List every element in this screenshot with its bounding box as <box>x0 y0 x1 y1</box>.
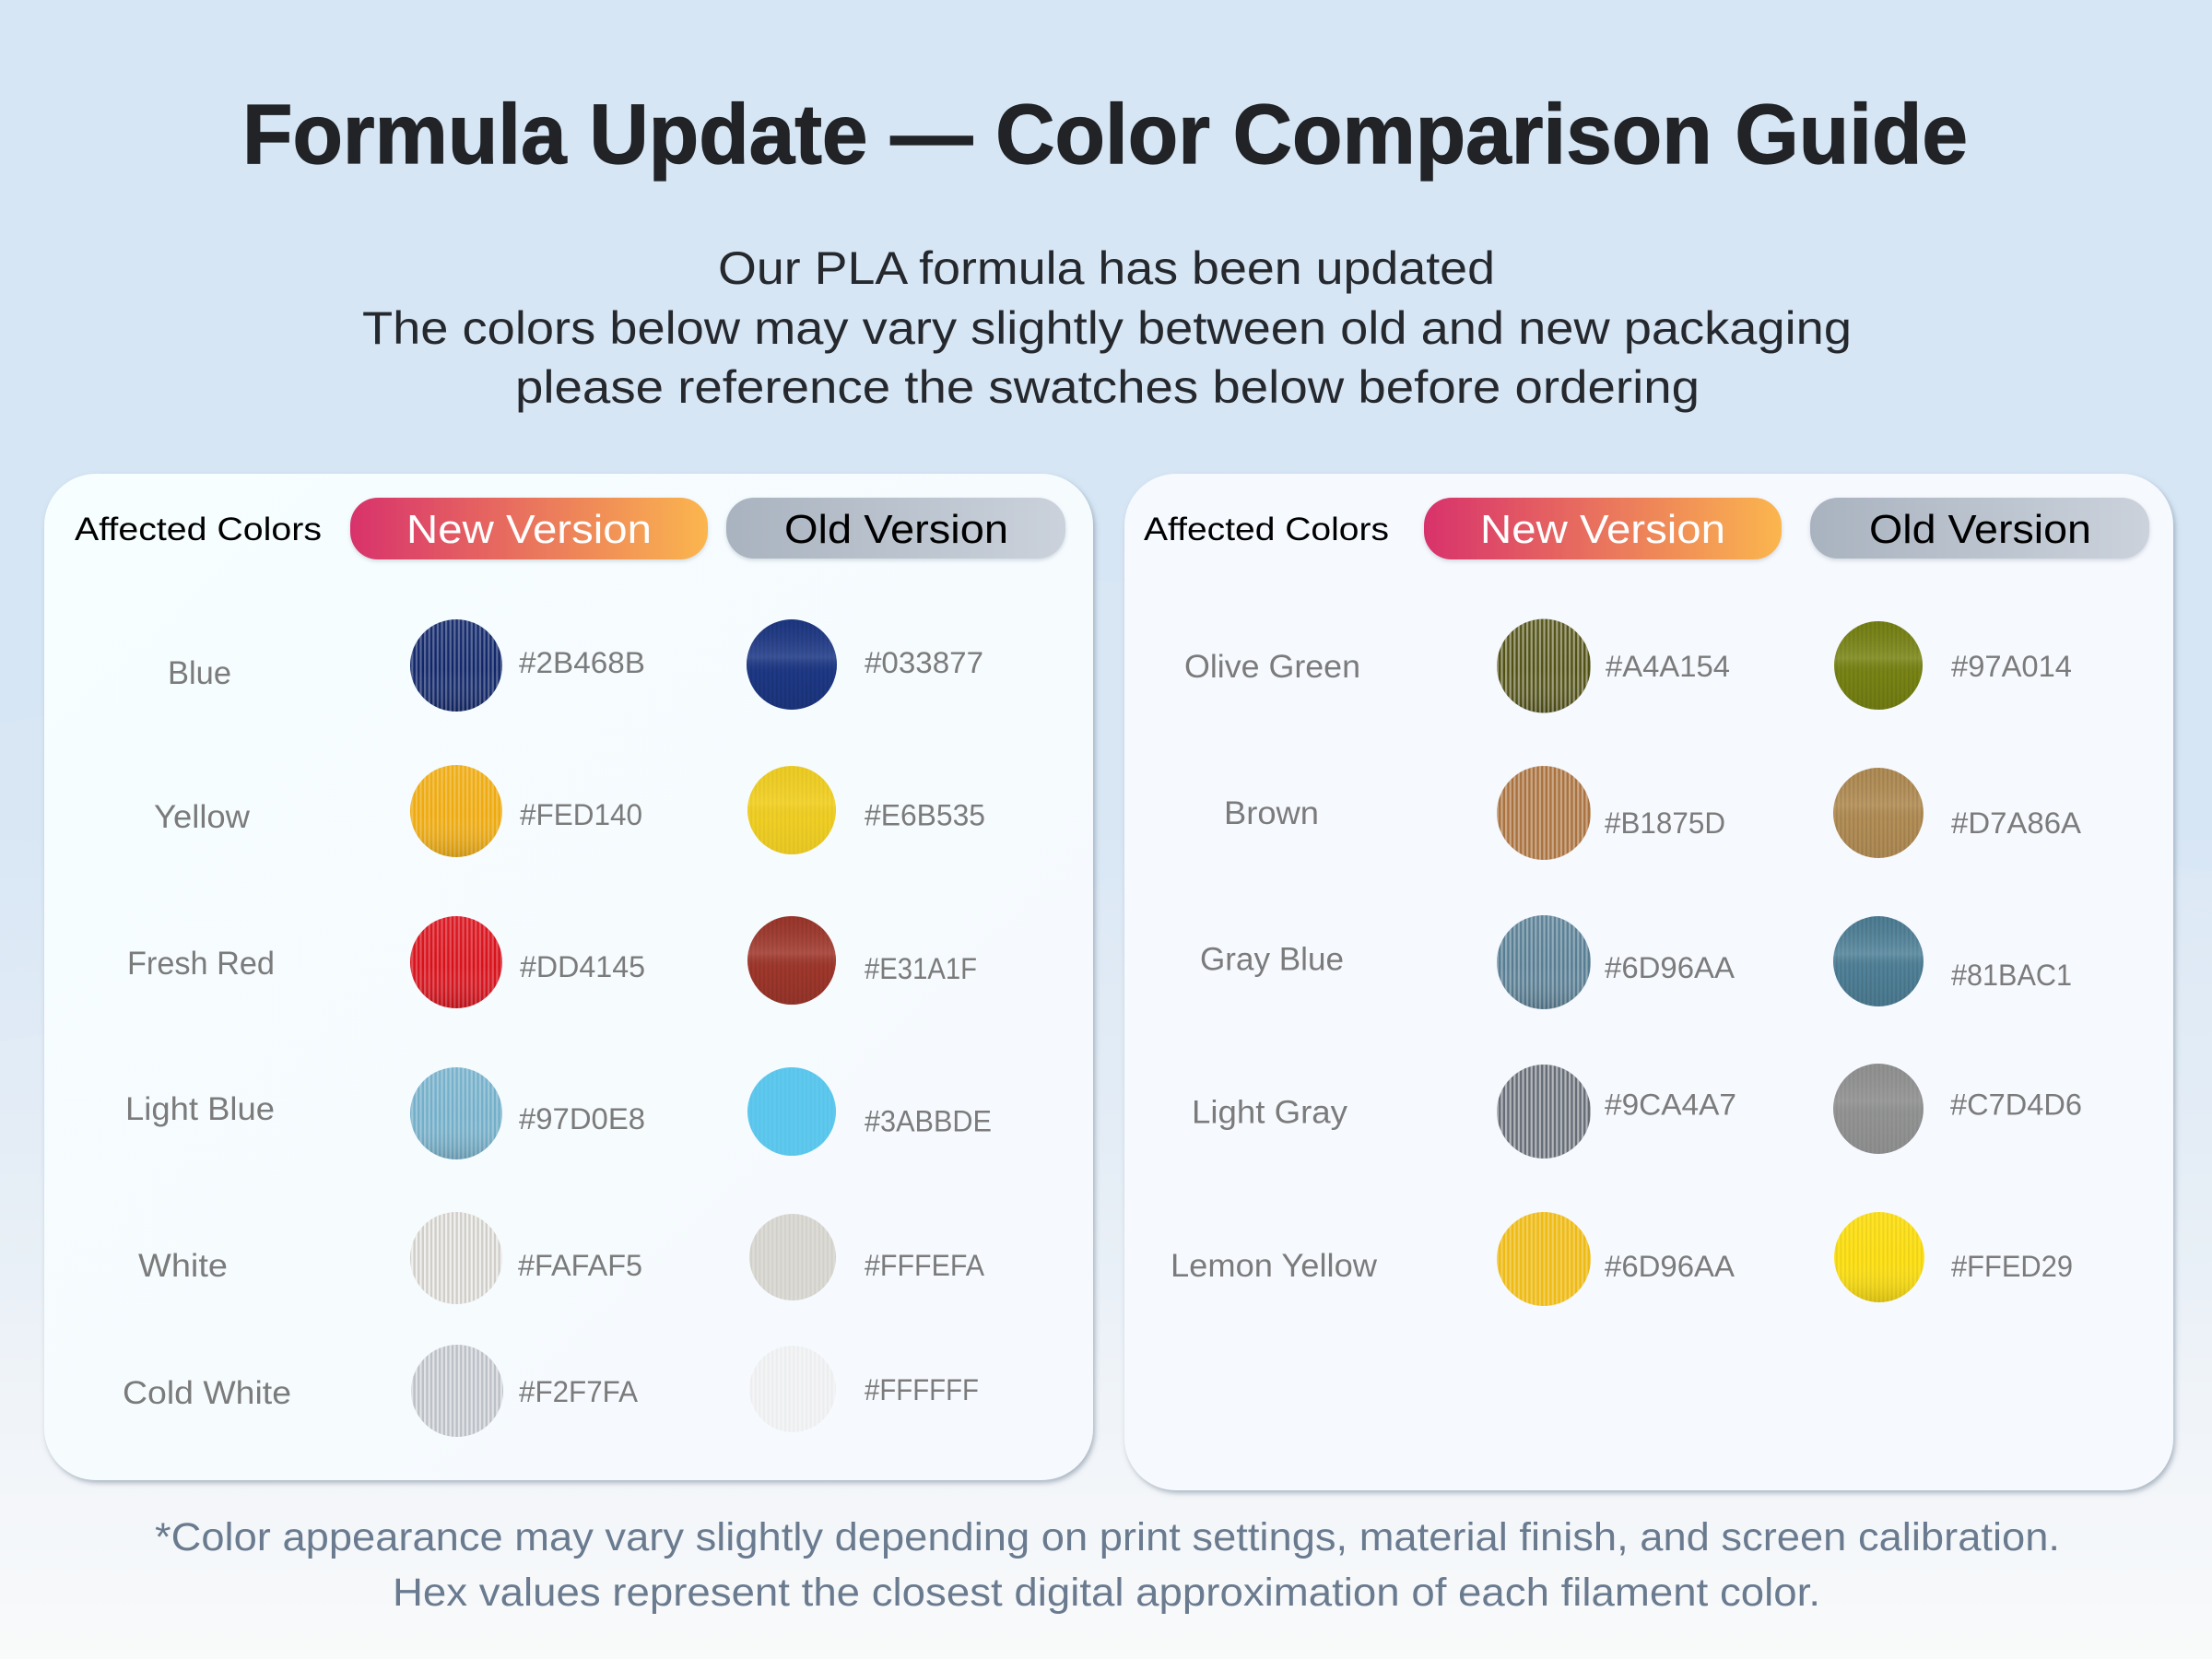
row: Blue: #033877 <box>865 646 983 679</box>
row: Blue <box>168 619 983 712</box>
row: Lemon Yellow: #FFED29 <box>1951 1250 2073 1283</box>
subtitle text block <box>362 242 1852 413</box>
row: Gray Blue: #6D96AA <box>1605 951 1735 984</box>
row: Olive Green <box>1184 619 2072 713</box>
row: Light Gray: #C7D4D6 <box>1950 1088 2082 1121</box>
row: Cold White: #F2F7FA <box>519 1375 639 1408</box>
row: White: #FAFAF5 <box>518 1249 642 1282</box>
row: Yellow: Yellow <box>154 799 251 835</box>
panel: left comparison table <box>44 474 1093 1480</box>
row: Fresh Red: #DD4145 <box>520 950 645 983</box>
row: Light Blue: Light Blue <box>125 1091 275 1127</box>
subtitle text block: Our PLA formula has been updated <box>718 242 1495 294</box>
row: Light Gray <box>1192 1064 2082 1159</box>
footnote: Hex values represent the closest digital approximation of each filament color. <box>393 1571 1820 1615</box>
panel: right comparison table <box>1124 474 2173 1490</box>
row: Fresh Red <box>127 916 977 1008</box>
row: Blue: #2B468B <box>519 646 645 679</box>
row: Light Blue <box>125 1067 992 1159</box>
row: Lemon Yellow <box>1171 1212 2073 1306</box>
row: White <box>138 1212 985 1304</box>
pill: old version <box>1810 498 2149 559</box>
row: Brown: #B1875D <box>1605 806 1725 840</box>
row: Fresh Red: #E31A1F <box>865 952 977 985</box>
subtitle text block: please reference the swatches below before ordering <box>515 361 1700 413</box>
pill: new version: New Version <box>406 507 652 552</box>
row: White: White <box>138 1248 228 1284</box>
pill: new version: New Version <box>1480 507 1725 552</box>
row: Cold White <box>123 1345 979 1437</box>
column heading: affected colors: Affected Colors <box>1144 512 1389 547</box>
footnote <box>155 1515 2060 1615</box>
row: Cold White: #FFFFFF <box>865 1373 979 1406</box>
row: Yellow: #FED140 <box>520 798 642 831</box>
row: Gray Blue <box>1200 915 2072 1009</box>
row: Cold White: Cold White <box>123 1375 291 1411</box>
row: Light Gray: Light Gray <box>1192 1095 1348 1130</box>
row: Lemon Yellow: Lemon Yellow <box>1171 1248 1378 1284</box>
row: Light Blue: #97D0E8 <box>519 1102 645 1135</box>
row: Brown <box>1224 766 2082 860</box>
pill: new version <box>350 498 708 559</box>
row: Brown: #D7A86A <box>1951 806 2082 840</box>
row: Yellow: #E6B535 <box>865 798 985 831</box>
row: Fresh Red: Fresh Red <box>127 946 275 982</box>
row: Yellow <box>154 765 985 857</box>
footnote: *Color appearance may vary slightly depending on print settings, material finish, and screen calibration. <box>155 1515 2060 1559</box>
row: Light Gray: #9CA4A7 <box>1605 1088 1736 1121</box>
row: Gray Blue: #81BAC1 <box>1951 959 2072 992</box>
row: Light Blue: #3ABBDE <box>865 1104 992 1137</box>
column heading: affected colors: Affected Colors <box>75 512 322 547</box>
pill: old version: Old Version <box>784 507 1008 552</box>
pill: new version <box>1424 498 1782 559</box>
row: Blue: Blue <box>168 655 231 691</box>
row: Lemon Yellow: #6D96AA <box>1605 1250 1735 1283</box>
row: Gray Blue: Gray Blue <box>1200 942 1344 977</box>
row: Olive Green: Olive Green <box>1184 649 1360 685</box>
title: Formula Update — Color Comparison Guide <box>242 88 1968 182</box>
row: White: #FFFEFA <box>865 1249 985 1282</box>
row: Brown: Brown <box>1224 795 1319 831</box>
row: Olive Green: #97A014 <box>1951 650 2072 683</box>
pill: old version: Old Version <box>1869 507 2091 552</box>
pill: old version <box>726 498 1065 559</box>
subtitle text block: The colors below may vary slightly between old and new packaging <box>362 302 1852 354</box>
row: Olive Green: #A4A154 <box>1606 650 1730 683</box>
